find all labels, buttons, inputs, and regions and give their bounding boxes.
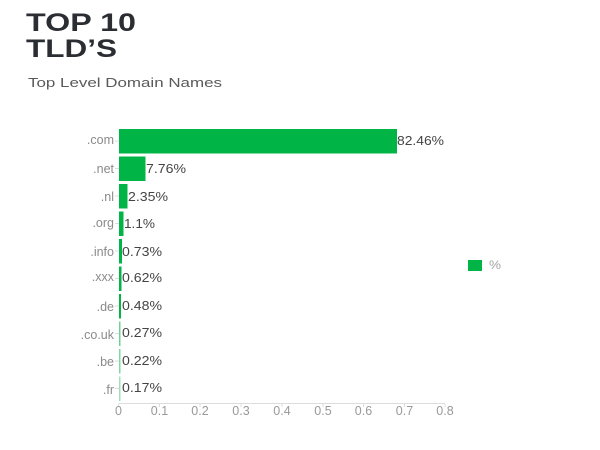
category labels: .com bbox=[87, 133, 114, 147]
category labels: .co.uk bbox=[81, 328, 115, 342]
x axis labels: 0.5 bbox=[314, 404, 332, 418]
legend: % bbox=[489, 260, 501, 272]
axes bbox=[115, 141, 445, 407]
x axis labels: 0.2 bbox=[191, 404, 209, 418]
subtitle: Top Level Domain Names bbox=[28, 75, 223, 90]
category labels: .org bbox=[92, 216, 114, 230]
category labels: .de bbox=[97, 300, 114, 314]
value labels: 0.22% bbox=[122, 354, 162, 368]
bar chart bbox=[81, 129, 454, 418]
category labels bbox=[81, 133, 115, 397]
value labels: 0.48% bbox=[122, 299, 162, 313]
category labels: .info bbox=[90, 245, 114, 259]
category labels: .be bbox=[97, 355, 114, 369]
value labels: 2.35% bbox=[128, 190, 168, 204]
bars bbox=[119, 129, 397, 401]
title: TOP 10 bbox=[26, 9, 136, 37]
value labels: 0.17% bbox=[122, 381, 162, 395]
title: TLD’S bbox=[26, 35, 117, 63]
x axis labels: 0.7 bbox=[396, 404, 413, 418]
category labels: .nl bbox=[101, 190, 114, 204]
value labels: 82.46% bbox=[397, 134, 444, 148]
x axis labels: 0 bbox=[115, 404, 122, 418]
x axis labels: 0.3 bbox=[232, 404, 250, 418]
value labels: 1.1% bbox=[124, 217, 155, 231]
x axis labels: 0.6 bbox=[355, 404, 372, 418]
category labels: .fr bbox=[103, 383, 114, 397]
value labels: 7.76% bbox=[146, 162, 186, 176]
value labels: 0.62% bbox=[122, 271, 162, 285]
category labels: .net bbox=[93, 162, 115, 176]
value labels bbox=[122, 134, 444, 395]
category labels: .xxx bbox=[92, 270, 115, 284]
title bbox=[26, 9, 136, 63]
x axis labels: 0.4 bbox=[273, 404, 291, 418]
value labels: 0.27% bbox=[122, 326, 162, 340]
x axis labels: 0.1 bbox=[151, 404, 168, 418]
value labels: 0.73% bbox=[122, 245, 162, 259]
x axis labels bbox=[115, 404, 454, 418]
legend bbox=[468, 260, 501, 272]
x axis labels: 0.8 bbox=[436, 404, 454, 418]
